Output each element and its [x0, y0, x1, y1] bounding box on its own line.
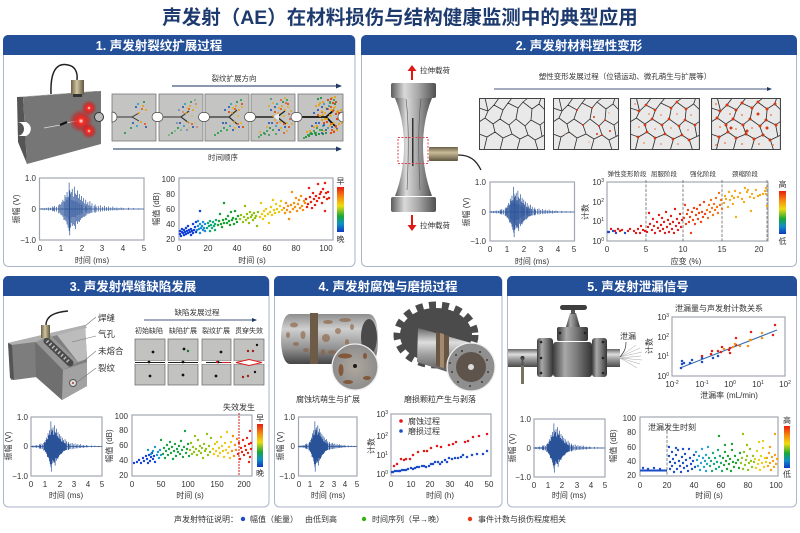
stage labels: 弹性变形阶段 — [608, 169, 647, 178]
footer legend: 事件计数与损伤程度相关 — [478, 514, 566, 524]
chart: leak rate vs counts: 计数 — [644, 338, 654, 354]
chart: leak rate vs counts: 2 — [788, 380, 791, 386]
chart: AE waveform 3: 2 — [58, 480, 63, 489]
arrow down: tensile load: 拉伸载荷 — [420, 220, 450, 230]
chart: amplitude scatter 3: 150 — [210, 480, 224, 489]
chart: AE waveform 1: 2 — [80, 244, 85, 253]
chart: AE waveform 2: 振幅 (V) — [461, 197, 471, 226]
illustration: valve and pipe with leak — [508, 305, 642, 384]
stage labels: 屈服阶段 — [651, 169, 678, 178]
chart: AE waveform 2: 0 — [482, 208, 487, 217]
chart: counts vs time scatter: 10 — [376, 451, 385, 460]
grain images — [479, 98, 781, 150]
illustration: tensile specimen with sensor — [391, 83, 481, 212]
chart: AE waveform 4: 0 — [297, 480, 302, 489]
weld labels with leader lines: 未熔合 — [98, 346, 124, 356]
chart: AE waveform 1: 时间 (ms) — [75, 255, 109, 265]
chart: amplitude scatter 5: 0 — [638, 481, 643, 490]
crack sequence images — [112, 94, 343, 141]
chart: amplitude scatter 3: 40 — [119, 456, 129, 465]
chart: amplitude scatter 3: 失效发生 — [223, 402, 255, 412]
colorbar 5: 高 — [783, 415, 791, 425]
chart: AE waveform 5: 时间 (ms) — [552, 490, 586, 500]
chart: amplitude scatter 3: 幅值 (dB) — [104, 429, 114, 463]
chart: leak rate vs counts: 10 — [695, 380, 704, 389]
chart: AE waveform 1: 1 — [59, 244, 64, 253]
chart: amplitude scatter 1: 80 — [166, 190, 176, 199]
label and arrow: deformation process — [494, 71, 772, 91]
illustration: corroded pipe with detail — [281, 313, 378, 390]
panel 5 header: 5. 声发射泄漏信号 — [587, 279, 689, 294]
label: leak — [620, 331, 636, 357]
weld labels with leader lines — [72, 313, 124, 383]
panel 2 header: 2. 声发射材料塑性变形 — [516, 38, 643, 53]
chart legend — [399, 416, 440, 436]
chart: counts vs strain scatter: 10 — [592, 198, 601, 207]
chart: counts vs time scatter: 30 — [446, 480, 455, 489]
panel 1 header: 1. 声发射裂纹扩展过程 — [96, 38, 223, 53]
chart: AE waveform 1: 0 — [38, 244, 43, 253]
chart: counts vs time scatter: 时间 (h) — [426, 490, 454, 500]
chart: AE waveform 3: 4 — [86, 480, 91, 489]
chart: counts vs time scatter: 50 — [485, 480, 494, 489]
chart: AE waveform 4: 时间 (ms) — [311, 490, 345, 500]
footer legend: 由低到高 — [305, 514, 337, 524]
colorbar 1 — [336, 177, 344, 244]
chart: amplitude scatter 5: 60 — [627, 443, 637, 452]
chart: amplitude scatter 1: 0 — [177, 244, 182, 253]
stage labels — [608, 169, 758, 178]
chart: amplitude scatter 1: 时间 (s) — [238, 255, 266, 265]
chart: AE waveform 3: 1 — [43, 480, 48, 489]
title: 声发射（AE）在材料损伤与结构健康监测中的典型应用 — [162, 6, 638, 29]
panel 4 header — [274, 276, 502, 296]
chart: leak rate vs counts: -1 — [704, 380, 709, 386]
chart: AE waveform 4: 1 — [308, 480, 313, 489]
chart: AE waveform 4: −1.0 — [279, 472, 296, 481]
chart legend: 腐蚀过程 — [408, 416, 440, 426]
chart: AE waveform 2: 5 — [572, 245, 577, 254]
chart: AE waveform 2: 1 — [505, 245, 510, 254]
footer legend: 时间序列（早→晚） — [372, 514, 444, 524]
chart: amplitude scatter 5: 100 — [623, 414, 637, 423]
chart: leak rate vs counts: 10 — [752, 380, 761, 389]
colorbar 5: 低 — [783, 469, 791, 479]
chart: amplitude scatter 5: 40 — [690, 481, 699, 490]
panel 1 header — [3, 35, 355, 55]
chart: leak rate vs counts: 1 — [761, 380, 764, 386]
chart: leak rate vs counts: 10 — [665, 380, 674, 389]
chart: amplitude scatter 3: 50 — [157, 480, 166, 489]
chart: AE waveform 3: 0 — [24, 442, 29, 451]
colorbar 3: 早 — [256, 414, 264, 423]
chart: leak rate vs counts: 泄漏量与声发射计数关系 — [675, 303, 763, 313]
chart: counts vs strain scatter: 5 — [644, 245, 649, 254]
chart: AE waveform 1: 5 — [142, 244, 147, 253]
stage labels: 颈缩阶段 — [732, 169, 758, 178]
footer legend — [174, 514, 566, 524]
panel: 4 corrosion and wear — [274, 276, 502, 507]
chart: counts vs time scatter: 2 — [385, 432, 388, 438]
weld labels with leader lines: 气孔 — [98, 329, 116, 339]
chart: amplitude scatter 1: 60 — [263, 244, 272, 253]
chart: AE waveform 4: 5 — [355, 480, 360, 489]
chart legend: 磨损过程 — [408, 426, 440, 436]
chart: leak rate vs counts: 1 — [666, 352, 669, 358]
chart: AE waveform 3: −1.0 — [12, 472, 29, 481]
chart: AE waveform 1: 1.0 — [25, 174, 37, 183]
weld labels with leader lines: 焊缝 — [98, 313, 116, 323]
colorbar 2: 低 — [778, 236, 786, 246]
chart: leak rate vs counts: 10 — [657, 313, 666, 322]
chart: counts vs time scatter — [366, 410, 494, 500]
weld labels with leader lines: 裂纹 — [98, 363, 116, 373]
defect stage images: 贯穿失效 — [235, 326, 263, 335]
chart: AE waveform 5: 0 — [527, 444, 532, 453]
chart: amplitude scatter 3: 时间 (s) — [176, 490, 204, 500]
chart: amplitude scatter 5: 时间 (s) — [695, 490, 723, 500]
illustration: worn gear shaft with detail — [397, 305, 495, 391]
chart: leak rate vs counts: 泄漏率 (mL/min) — [700, 390, 758, 400]
chart: amplitude scatter 5: 幅值 (dB) — [608, 429, 618, 463]
chart: counts vs strain scatter: 3 — [601, 178, 604, 184]
chart: amplitude scatter 5 — [608, 414, 791, 500]
footer legend: 声发射特征说明： — [174, 514, 238, 524]
chart: AE waveform 5: 3 — [575, 481, 580, 490]
defect stage images: 缺陷扩展 — [169, 326, 197, 335]
chart: AE waveform 4 — [275, 413, 360, 500]
chart: amplitude scatter 5: 20 — [627, 471, 637, 480]
chart: AE waveform 1: 3 — [100, 244, 105, 253]
chart: amplitude scatter 3: 20 — [119, 471, 129, 480]
chart: AE waveform 3: 5 — [100, 480, 105, 489]
chart: amplitude scatter 3 — [104, 402, 264, 500]
chart: AE waveform 2: 2 — [522, 245, 527, 254]
chart: amplitude scatter 1: 20 — [204, 244, 213, 253]
chart: AE waveform 3 — [3, 413, 105, 500]
arrow and label: time order: 时间顺序 — [208, 152, 238, 162]
arrow and label: time order — [113, 146, 342, 162]
chart: counts vs time scatter: 0 — [385, 470, 388, 476]
chart: amplitude scatter 1: 40 — [233, 244, 242, 253]
chart: counts vs time scatter: 10 — [376, 432, 385, 441]
chart: AE waveform 2 — [461, 178, 577, 266]
panel: 5 leak signal — [507, 276, 797, 507]
arrow down: tensile load — [408, 215, 450, 231]
chart: leak rate vs counts: 0 — [666, 372, 669, 378]
chart: counts vs time scatter: 3 — [385, 410, 388, 416]
chart: AE waveform 3: 3 — [72, 480, 77, 489]
chart: AE waveform 5: −1.0 — [515, 473, 532, 482]
chart: amplitude scatter 5: 60 — [717, 481, 726, 490]
chart: AE waveform 1: 4 — [121, 244, 126, 253]
chart: AE waveform 4: 4 — [343, 480, 348, 489]
chart: AE waveform 3: 0 — [29, 480, 34, 489]
panel 3 header: 3. 声发射焊缝缺陷发展 — [70, 279, 197, 294]
chart: counts vs strain scatter: 计数 — [580, 204, 590, 220]
captions: 磨损颗粒产生与剥落 — [404, 394, 476, 404]
chart: counts vs time scatter: 20 — [426, 480, 435, 489]
panel: 2 plastic deformation — [361, 35, 797, 266]
chart: AE waveform 5: 5 — [603, 481, 608, 490]
chart: amplitude scatter 3: 60 — [119, 441, 129, 450]
chart: amplitude scatter 1 — [151, 175, 344, 265]
chart: amplitude scatter 1: 幅值 (dB) — [151, 192, 161, 226]
chart: amplitude scatter 3: 0 — [130, 480, 135, 489]
chart: AE waveform 5: 振幅 (V) — [507, 433, 517, 462]
chart: AE waveform 4: 1.0 — [284, 413, 296, 422]
stage labels: 强化阶段 — [690, 169, 716, 178]
label and arrow: defect process — [144, 307, 257, 322]
chart: AE waveform 5: 0 — [532, 481, 537, 490]
chart: AE waveform 5: 2 — [560, 481, 565, 490]
chart: AE waveform 2: 时间 (ms) — [515, 256, 549, 266]
chart: amplitude scatter 1: 80 — [292, 244, 301, 253]
chart: leak rate vs counts: 10 — [724, 380, 733, 389]
chart: amplitude scatter 5: 80 — [744, 481, 753, 490]
chart: leak rate vs counts: 0 — [733, 380, 736, 386]
chart: leak rate vs counts: 2 — [666, 333, 669, 339]
chart: AE waveform 4: 2 — [320, 480, 325, 489]
chart: counts vs time scatter: 0 — [389, 480, 394, 489]
chart: AE waveform 2: 1.0 — [475, 178, 487, 187]
captions — [296, 394, 476, 404]
chart: amplitude scatter 3: 80 — [119, 426, 129, 435]
chart: AE waveform 1 — [11, 174, 147, 265]
label: leak: 泄漏 — [620, 331, 636, 341]
chart: counts vs strain scatter: 20 — [755, 245, 764, 254]
chart: counts vs time scatter: 10 — [376, 410, 385, 419]
arrow up: tensile load — [408, 65, 450, 80]
chart: AE waveform 2: 3 — [539, 245, 544, 254]
chart: AE waveform 1: 0 — [32, 205, 37, 214]
chart: AE waveform 4: 3 — [332, 480, 337, 489]
chart: amplitude scatter 1: 20 — [166, 235, 176, 244]
chart: counts vs strain scatter: 2 — [601, 198, 604, 204]
chart: counts vs time scatter: 计数 — [366, 438, 376, 454]
chart: leak rate vs counts: 10 — [657, 333, 666, 342]
chart: counts vs time scatter: 40 — [465, 480, 474, 489]
chart: amplitude scatter 1: 60 — [166, 205, 176, 214]
chart: leak rate vs counts: 3 — [666, 313, 669, 319]
colorbar 2 — [778, 179, 786, 246]
chart: amplitude scatter 1: 100 — [319, 244, 333, 253]
chart: amplitude scatter 5: 40 — [627, 457, 637, 466]
panel 4 header: 4. 声发射腐蚀与磨损过程 — [319, 279, 458, 294]
label and arrow: crack direction: 裂纹扩展方向 — [212, 73, 256, 83]
chart: counts vs strain scatter: 1 — [601, 217, 604, 223]
chart: AE waveform 4: 0 — [291, 442, 296, 451]
chart: amplitude scatter 1: 40 — [166, 220, 176, 229]
colorbar 1: 早 — [336, 177, 344, 186]
colorbar 1: 晚 — [336, 234, 344, 244]
chart: amplitude scatter 5: 80 — [627, 428, 637, 437]
chart: counts vs strain scatter: 10 — [679, 245, 688, 254]
colorbar 2: 高 — [778, 179, 786, 189]
panel 3 header — [3, 276, 269, 296]
chart: leak rate vs counts: 10 — [657, 352, 666, 361]
chart: AE waveform 1: −1.0 — [20, 236, 37, 245]
panel 2 header — [361, 35, 797, 55]
chart: leak rate vs counts: 10 — [779, 380, 788, 389]
captions: 腐蚀坑萌生与扩展 — [296, 394, 360, 404]
chart: counts vs strain scatter: 15 — [718, 245, 727, 254]
footer legend: 幅值（能量） — [250, 514, 298, 524]
chart: counts vs strain scatter: 应变 (%) — [671, 256, 702, 266]
chart: amplitude scatter 5: 20 — [663, 481, 672, 490]
chart: amplitude scatter 5: 泄漏发生时刻 — [648, 422, 696, 432]
chart: AE waveform 3: 1.0 — [17, 413, 29, 422]
panel: 1 crack propagation — [3, 35, 355, 266]
chart: amplitude scatter 3: 100 — [181, 480, 195, 489]
chart: counts vs strain scatter — [580, 169, 786, 266]
panel 5 header — [507, 276, 797, 296]
chart: AE waveform 5: 1 — [546, 481, 551, 490]
chart: AE waveform 2: −1.0 — [470, 237, 487, 246]
icon: acoustic emission glow points — [69, 100, 97, 139]
chart: AE waveform 3: 时间 (ms) — [49, 490, 83, 500]
chart: amplitude scatter 3: 100 — [115, 412, 129, 421]
chart: amplitude scatter 5: 100 — [769, 481, 783, 490]
detail circle: corrosion pit — [332, 344, 378, 390]
defect stage images: 初始缺陷 — [135, 326, 163, 335]
chart: counts vs strain scatter: 0 — [605, 245, 610, 254]
chart: amplitude scatter 3: 200 — [237, 480, 251, 489]
defect stage images: 裂纹扩展 — [202, 326, 230, 335]
detail circle: wear particles — [447, 343, 495, 391]
chart: counts vs time scatter: 1 — [385, 451, 388, 457]
label and arrow: defect process: 缺陷发展过程 — [174, 307, 220, 317]
chart: AE waveform 4: 振幅 (V) — [275, 431, 285, 460]
illustration: cracked plate with sensor — [17, 65, 104, 164]
illustration: T-welded block with sensor — [8, 311, 87, 400]
chart: AE waveform 5: 4 — [589, 481, 594, 490]
label and arrow: deformation process: 塑性变形发展过程（位错运动、微孔萌生与扩展等） — [539, 71, 711, 81]
arrow up: tensile load: 拉伸载荷 — [420, 65, 450, 75]
colorbar 5 — [783, 415, 791, 479]
chart: AE waveform 2: 4 — [556, 245, 561, 254]
chart: leak rate vs counts: 10 — [657, 372, 666, 381]
chart: leak rate vs counts: -2 — [674, 380, 679, 386]
chart: AE waveform 5: 1.0 — [520, 415, 532, 424]
chart: amplitude scatter 1: 100 — [162, 175, 176, 184]
chart: counts vs strain scatter: 10 — [592, 217, 601, 226]
chart: counts vs strain scatter: 10 — [592, 237, 601, 246]
colorbar 3: 晚 — [256, 468, 264, 478]
chart: counts vs strain scatter: 0 — [601, 237, 604, 243]
chart: AE waveform 2: 0 — [488, 245, 493, 254]
chart: leak rate vs counts — [644, 303, 791, 400]
chart: counts vs time scatter: 10 — [407, 480, 416, 489]
icon: leak spray — [620, 345, 642, 368]
defect stage images — [135, 326, 264, 385]
colorbar 3 — [256, 414, 264, 478]
label and arrow: crack direction — [172, 73, 342, 88]
chart: AE waveform 3: 振幅 (V) — [3, 431, 13, 460]
chart: counts vs strain scatter: 10 — [592, 178, 601, 187]
panel: 3 weld defects — [3, 276, 269, 507]
chart: counts vs time scatter: 10 — [376, 470, 385, 479]
chart: AE waveform 1: 振幅 (V) — [11, 194, 21, 223]
chart: AE waveform 5 — [507, 415, 608, 500]
